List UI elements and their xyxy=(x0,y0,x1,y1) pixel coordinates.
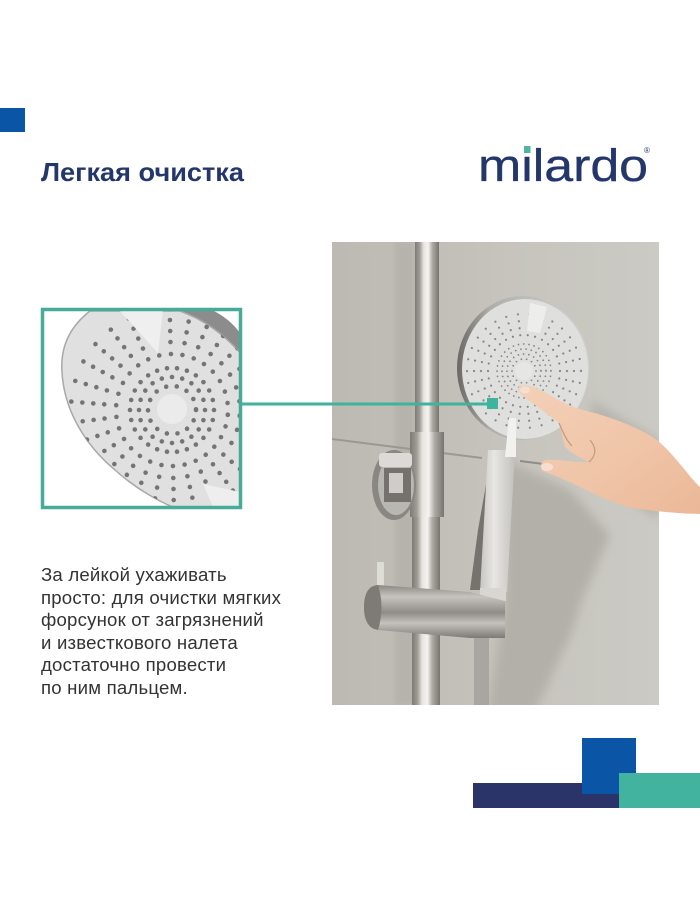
description text: форсунок от загрязнений xyxy=(41,609,264,630)
description text: достаточно провести xyxy=(41,654,226,675)
description text: просто: для очистки мягких xyxy=(41,587,282,608)
decorative corner blocks xyxy=(473,738,700,808)
inset: shower head close-up xyxy=(40,308,242,510)
hand xyxy=(518,385,700,514)
description text: и известкового налета xyxy=(41,632,238,653)
description text: За лейкой ухаживать xyxy=(41,564,227,585)
title: Легкая очистка xyxy=(41,157,245,187)
sliding rail xyxy=(410,242,444,705)
logo: milardo: milardo xyxy=(478,140,648,191)
description text: по ним пальцем. xyxy=(41,677,188,698)
wall bracket xyxy=(372,450,416,520)
slider holder xyxy=(364,562,505,638)
logo: milardo: ® xyxy=(644,146,650,155)
handle xyxy=(470,450,515,601)
photo: shower system xyxy=(332,242,659,712)
inset frame xyxy=(42,310,240,508)
shower head xyxy=(457,296,589,457)
hose xyxy=(474,638,489,705)
decorative corner square xyxy=(0,108,25,132)
connector line and marker xyxy=(242,398,498,409)
